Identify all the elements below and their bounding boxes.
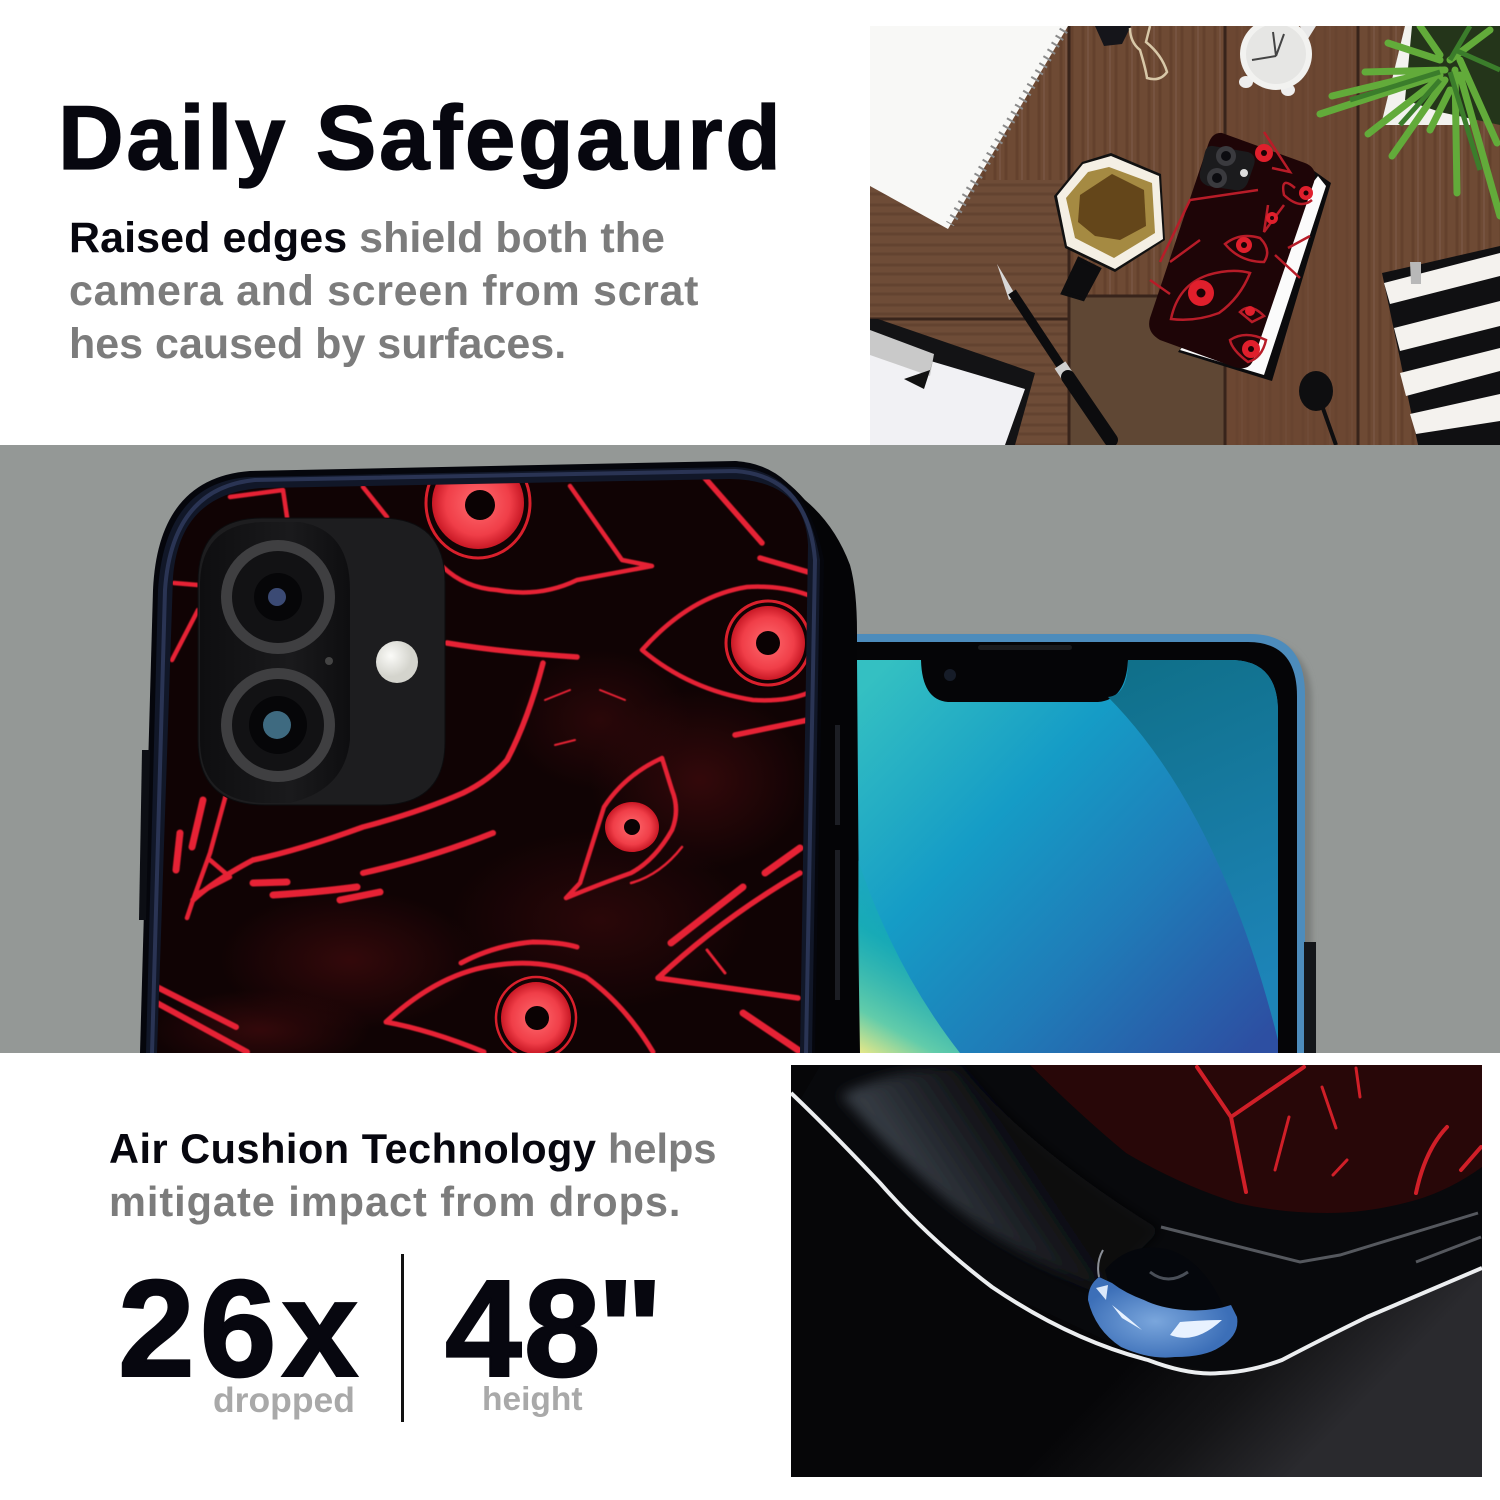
- clipboard: [870, 319, 1035, 445]
- panel: grey band with phones: [0, 445, 1500, 1053]
- white edge line: [791, 1093, 1482, 1373]
- stat: 26x dropped: 26x: [118, 1252, 363, 1406]
- phone in photo: [1149, 132, 1331, 381]
- text block: air cushion: mitigate impact from drops.: [109, 1178, 681, 1225]
- divider: [401, 1254, 404, 1422]
- front phone: iPhone with blue screen: [855, 634, 1316, 1053]
- stat: 48" height: 48": [445, 1252, 665, 1406]
- lens top: [221, 540, 335, 654]
- binder clip: [1095, 26, 1167, 79]
- surface below the case: [791, 1093, 1482, 1477]
- pen: [997, 264, 1111, 440]
- photo: case corner close-up with water drop: [791, 1065, 1482, 1477]
- back phone: case with red eyes: [139, 448, 860, 1070]
- spoon: [1299, 371, 1336, 445]
- stat: 48" height: height: [482, 1381, 582, 1418]
- lens bottom: [221, 668, 335, 782]
- text block: air cushion: [109, 1125, 716, 1225]
- text block: air cushion: Air Cushion Technology helps: [109, 1125, 716, 1172]
- bumper highlights: [1161, 1213, 1481, 1262]
- stat: 26x dropped: dropped: [213, 1380, 355, 1420]
- text block: raised edges: [69, 214, 699, 368]
- striped notebook: [1382, 246, 1500, 445]
- text block: raised edges: hes caused by surfaces.: [69, 320, 566, 368]
- photo: desk flat lay: [870, 26, 1500, 445]
- coffee cup: [1054, 153, 1165, 299]
- bumper sheen: [840, 1066, 1160, 1290]
- text block: raised edges: camera and screen from scrat: [69, 267, 699, 315]
- flash: [376, 641, 418, 683]
- water drop: [1088, 1248, 1237, 1358]
- camera module: [198, 518, 445, 805]
- title: Daily Safegaurd: [58, 88, 783, 189]
- case artwork: [150, 448, 810, 1070]
- notebook: [870, 26, 1068, 229]
- printed case artwork: [1030, 1065, 1482, 1213]
- wood planks: [870, 26, 1500, 445]
- text block: raised edges: Raised edges shield both the: [69, 214, 665, 262]
- case bumper: [800, 1066, 1482, 1373]
- plant: [1320, 26, 1500, 216]
- alarm clock: [1239, 18, 1316, 96]
